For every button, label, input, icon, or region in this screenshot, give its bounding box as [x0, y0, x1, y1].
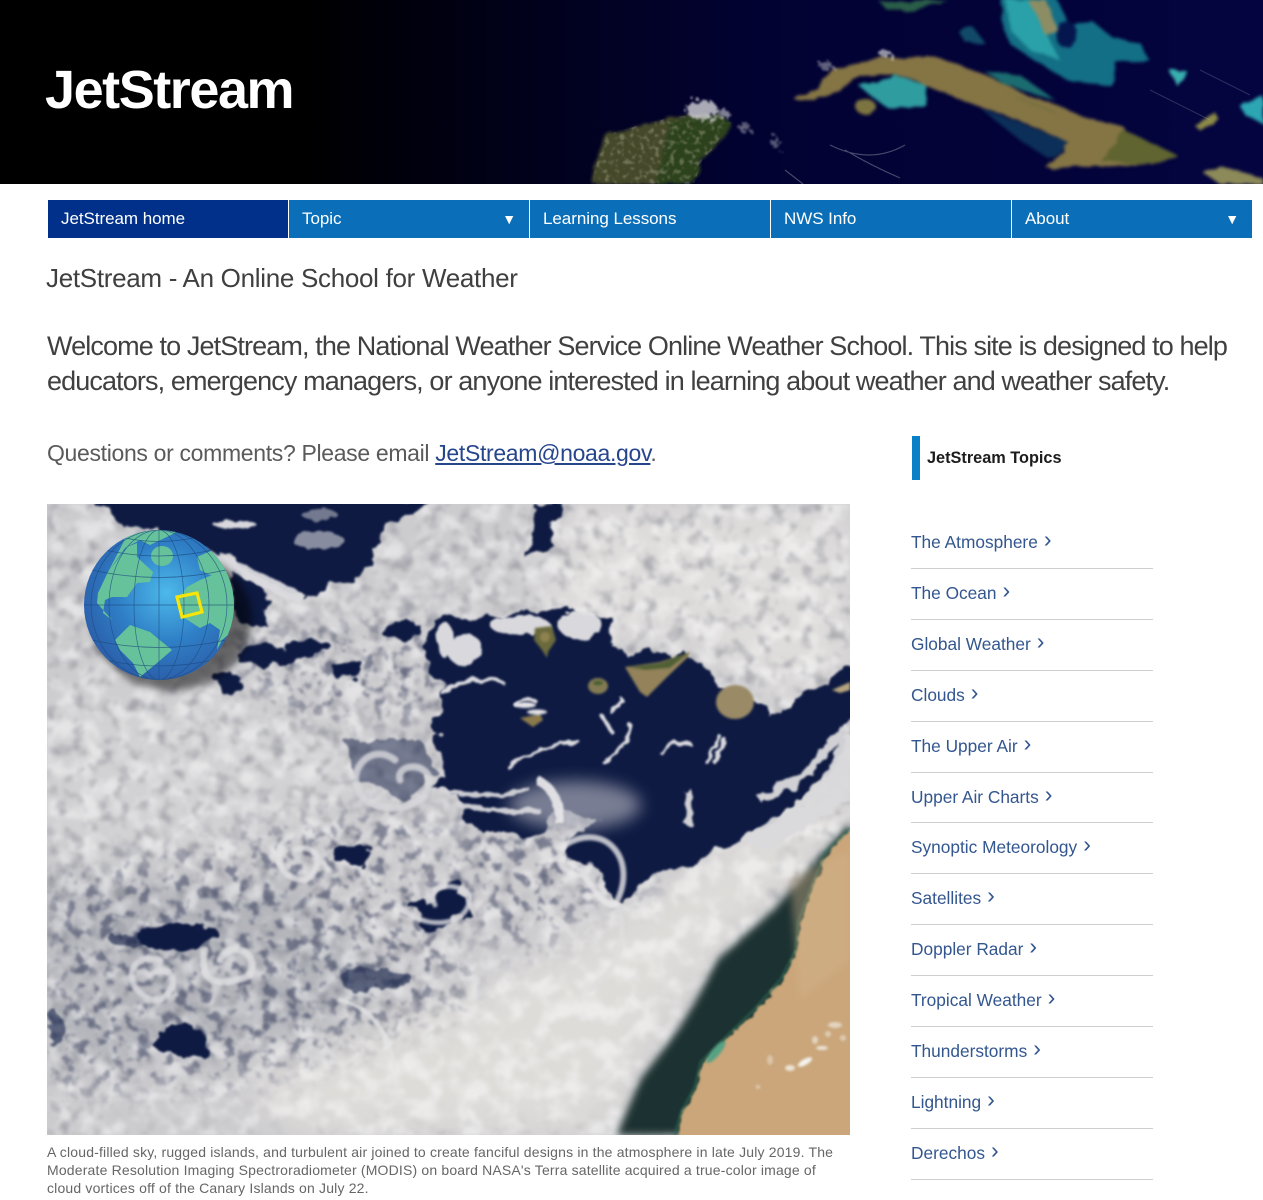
- image caption: Moderate Resolution Imaging Spectroradiometer (MODIS) on board NASA's Terra satellite acquired a true-color image of: [47, 1162, 816, 1178]
- topic: Tropical Weather: [911, 976, 1153, 1027]
- locator globe: [84, 524, 252, 690]
- nav: JetStream home: [48, 200, 288, 238]
- topic: The Ocean: The Ocean ›: [911, 577, 1010, 603]
- topic: Doppler Radar: [911, 925, 1153, 976]
- heading text: JetStream Topics: [927, 449, 1062, 467]
- contact line: Questions or comments? Please email JetStream@noaa.gov.: [47, 440, 656, 466]
- topic: Upper Air Charts: Upper Air Charts ›: [911, 781, 1052, 807]
- topic: Derechos: [911, 1129, 1153, 1180]
- heading accent bar: [912, 436, 920, 480]
- nav: Topic: ▼: [502, 211, 516, 227]
- image caption: A cloud-filled sky, rugged islands, and turbulent air joined to create fanciful designs in the atmosphere in late July 2019. The: [47, 1144, 833, 1160]
- topic: Synoptic Meteorology: Synoptic Meteorology ›: [911, 831, 1091, 857]
- locator square: [177, 593, 202, 617]
- header banner: satellite view of Cuba and Caribbean: [0, 0, 1263, 184]
- topic: Satellites: [911, 874, 1153, 925]
- intro paragraph: [47, 331, 1227, 396]
- Sahara desert coast: [677, 826, 858, 1142]
- nav: Learning Lessons: [530, 200, 770, 238]
- nav: Topic: Topic: [302, 209, 341, 228]
- intro paragraph: educators, emergency managers, or anyone interested in learning about weather and weather safety.: [47, 366, 1169, 396]
- nav: Topic: [289, 200, 529, 238]
- topic: Tropical Weather: Tropical Weather ›: [911, 984, 1055, 1010]
- African coastal water: [617, 823, 850, 1135]
- topic: Lightning: Lightning ›: [911, 1086, 995, 1112]
- topic: Lightning: [911, 1078, 1153, 1129]
- image caption: [47, 1144, 833, 1196]
- topic: Upper Air Charts: [911, 773, 1153, 823]
- cloud ridge and specks over dark ocean: [213, 509, 850, 850]
- nav: About: [1012, 200, 1252, 238]
- topic: The Atmosphere: The Atmosphere ›: [911, 526, 1051, 552]
- nav: About: ▼: [1225, 211, 1239, 227]
- image caption: cloud vortices off of the Canary Islands on July 22.: [47, 1180, 369, 1196]
- topic: Thunderstorms: [911, 1027, 1153, 1078]
- intro paragraph: Welcome to JetStream, the National Weather Service Online Weather School. This site is designed to help: [47, 331, 1227, 361]
- topic: Derechos: Derechos ›: [911, 1137, 999, 1163]
- topic: Clouds: [911, 671, 1153, 722]
- nav: NWS Info: NWS Info: [784, 209, 856, 228]
- logo: JetStream: JetStream: [45, 60, 293, 120]
- topic: Satellites: Satellites ›: [911, 882, 995, 908]
- nav: NWS Info: [771, 200, 1011, 238]
- nav: About: About: [1025, 209, 1069, 228]
- topic: Global Weather: Global Weather ›: [911, 628, 1044, 654]
- topic: The Atmosphere: [911, 518, 1153, 569]
- topic: The Ocean: [911, 569, 1153, 620]
- topic: Global Weather: [911, 620, 1153, 671]
- desert clouds: [756, 1022, 846, 1089]
- sidebar heading: JetStream Topics: [912, 436, 1062, 480]
- streaky cloud field south of the islands: [509, 781, 641, 829]
- nav: Learning Lessons: Learning Lessons: [543, 209, 676, 228]
- page heading: JetStream - An Online School for Weather: [46, 263, 518, 293]
- Canary Islands: [514, 626, 850, 727]
- sidebar topic list: [911, 526, 1153, 1180]
- nav: JetStream home: JetStream home: [61, 209, 185, 228]
- topic: Clouds: Clouds ›: [911, 679, 978, 705]
- cloud vortices: [132, 754, 623, 1070]
- topic: Doppler Radar: Doppler Radar ›: [911, 933, 1037, 959]
- satellite image: cloud vortices off the Canary Islands: [47, 504, 850, 1135]
- topic: Synoptic Meteorology: [911, 823, 1153, 874]
- dark ocean: [45, 498, 856, 1058]
- topic: The Upper Air: [911, 722, 1153, 773]
- navigation bar: [48, 200, 1252, 238]
- topic: Thunderstorms: Thunderstorms ›: [911, 1035, 1041, 1061]
- topic: The Upper Air: The Upper Air ›: [911, 730, 1031, 756]
- cloud base: [47, 504, 850, 1135]
